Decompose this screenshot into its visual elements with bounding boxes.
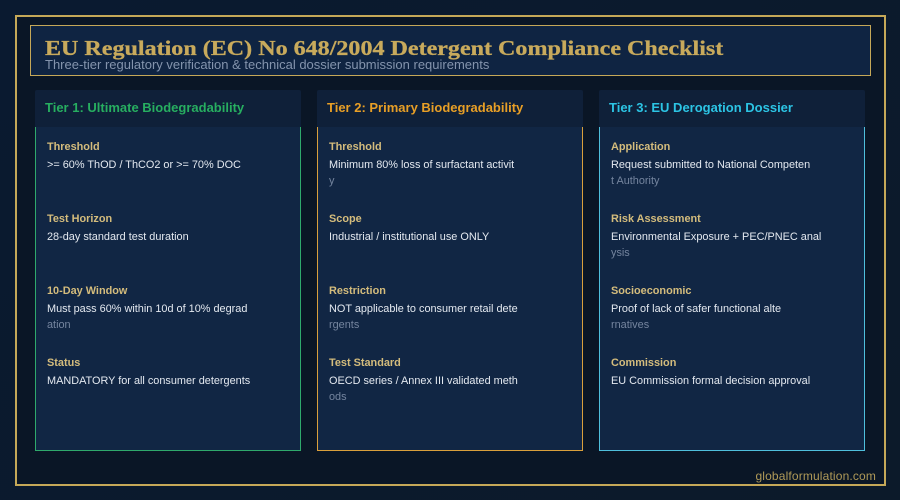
scope item: Scope (329, 213, 362, 225)
tier 3 body (599, 127, 865, 451)
risk assessment item: ysis (611, 247, 630, 259)
tier 3 heading (599, 90, 865, 127)
test standard item: OECD series / Annex III validated meth (329, 375, 518, 387)
threshold item: Threshold (47, 141, 100, 153)
threshold item: Threshold (329, 141, 382, 153)
footer source: globalformulation.com (755, 469, 876, 483)
tier 2 heading (317, 90, 583, 127)
tier 2 body (317, 127, 583, 451)
risk assessment item: Risk Assessment (611, 213, 701, 225)
panel: tier 1 (35, 90, 301, 451)
test horizon item: Test Horizon (47, 213, 112, 225)
scope item: Industrial / institutional use ONLY (329, 231, 489, 243)
application item: Application (611, 141, 670, 153)
test standard item (329, 357, 518, 403)
threshold item (47, 141, 241, 171)
test horizon item (47, 213, 189, 243)
restriction item: Restriction (329, 285, 386, 297)
test standard item: Test Standard (329, 357, 401, 369)
threshold item: Minimum 80% loss of surfactant activit (329, 159, 514, 171)
header panel (30, 25, 871, 76)
status item: MANDATORY for all consumer detergents (47, 375, 250, 387)
socioeconomic item: rnatives (611, 319, 649, 331)
risk assessment item (611, 213, 821, 259)
title: EU Regulation (EC) No 648/2004 Detergent Compliance Checklist (45, 36, 723, 60)
restriction item: rgents (329, 319, 359, 331)
risk assessment item: Environmental Exposure + PEC/PNEC anal (611, 231, 821, 243)
tier 1 heading (35, 90, 301, 127)
commission item (611, 357, 810, 387)
status item: Status (47, 357, 80, 369)
threshold item (329, 141, 514, 187)
10-day window item: 10-Day Window (47, 285, 127, 297)
scope item (329, 213, 489, 243)
panel: tier 3 (599, 90, 865, 451)
application item: Request submitted to National Competen (611, 159, 810, 171)
restriction item (329, 285, 518, 331)
test standard item: ods (329, 391, 347, 403)
socioeconomic item (611, 285, 781, 331)
socioeconomic item: Socioeconomic (611, 285, 692, 297)
commission item: EU Commission formal decision approval (611, 375, 810, 387)
commission item: Commission (611, 357, 676, 369)
10-day window item (47, 285, 247, 331)
subtitle: Three-tier regulatory verification & technical dossier submission requirements (45, 57, 489, 72)
10-day window item: Must pass 60% within 10d of 10% degrad (47, 303, 247, 315)
10-day window item: ation (47, 319, 71, 331)
restriction item: NOT applicable to consumer retail dete (329, 303, 518, 315)
tier 1 body (35, 127, 301, 451)
panel: tier 2 (317, 90, 583, 451)
application item (611, 141, 810, 187)
threshold item: >= 60% ThOD / ThCO2 or >= 70% DOC (47, 159, 241, 171)
tier 1 heading: Tier 1: Ultimate Biodegradability (45, 100, 244, 115)
test horizon item: 28-day standard test duration (47, 231, 189, 243)
application item: t Authority (611, 175, 659, 187)
status item (47, 357, 250, 387)
threshold item: y (329, 175, 334, 187)
socioeconomic item: Proof of lack of safer functional alte (611, 303, 781, 315)
tier 2 heading: Tier 2: Primary Biodegradability (327, 100, 523, 115)
tier 3 heading: Tier 3: EU Derogation Dossier (609, 100, 793, 115)
